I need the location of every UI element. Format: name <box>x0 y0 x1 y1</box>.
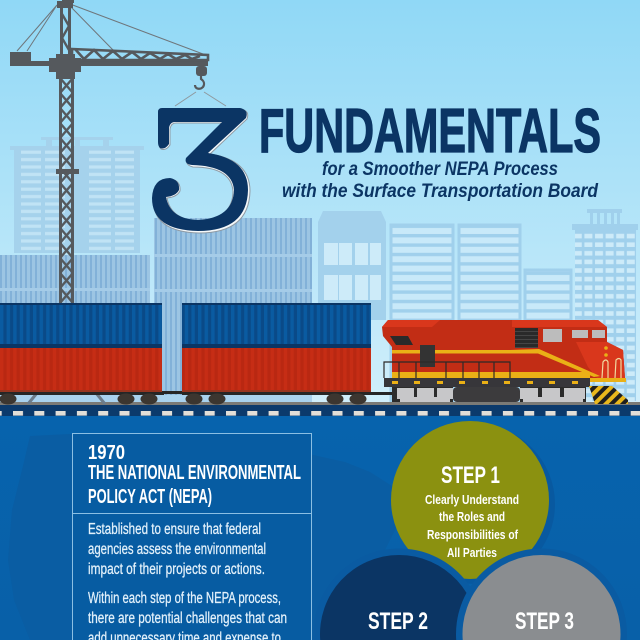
step 1 description: All Parties <box>447 545 497 560</box>
coupler to locomotive <box>371 392 395 395</box>
crane base legs <box>28 393 105 404</box>
blue lower panel <box>0 416 640 640</box>
container wagon left <box>0 303 164 404</box>
locomotive windows <box>543 329 605 342</box>
locomotive dark band <box>384 378 590 387</box>
circle: step 3 <box>456 549 627 640</box>
locomotive lights <box>604 346 608 357</box>
red container left <box>0 348 162 392</box>
locomotive door <box>420 345 435 367</box>
locomotive front truck <box>520 387 586 402</box>
step 1 description: Clearly Understand <box>425 492 519 507</box>
building: right tower <box>572 209 638 401</box>
circle: step 1 <box>391 421 555 584</box>
box body text <box>88 521 287 640</box>
building: striped tower one <box>391 225 453 405</box>
step 1 description: Responsibilities of <box>427 527 519 542</box>
building: left tower <box>10 137 144 253</box>
building: windowed block <box>318 211 386 320</box>
crane counterweight <box>10 52 55 66</box>
locomotive front handrails <box>602 358 621 378</box>
step 1 description: the Roles and <box>439 509 505 524</box>
locomotive <box>382 320 628 404</box>
subtitle <box>282 159 598 202</box>
crane mast <box>57 0 74 56</box>
locomotive body <box>382 320 625 378</box>
panel: NEPA info box <box>72 434 312 640</box>
box body text: there are potential challenges that can <box>88 610 287 627</box>
circle: step 2 <box>314 549 484 640</box>
locomotive railing <box>384 362 510 378</box>
locomotive roof highlights <box>382 320 607 327</box>
box heading <box>88 442 301 508</box>
subtitle: for a Smoother NEPA Process <box>322 159 558 180</box>
crane cables <box>17 4 203 54</box>
box frame <box>72 434 312 640</box>
step 3 heading: STEP 3 <box>515 608 574 635</box>
faint map of the United States <box>8 434 410 640</box>
background city skyline <box>0 137 638 405</box>
locomotive vent <box>390 336 413 345</box>
locomotive hazard pilot <box>589 386 628 404</box>
locomotive nose highlight <box>576 342 625 378</box>
red container right <box>182 348 371 392</box>
locomotive rear truck <box>392 387 453 402</box>
crane tower <box>56 78 79 303</box>
box body text: agencies assess the environmental <box>88 541 266 558</box>
coupler <box>162 391 183 394</box>
crane hook <box>175 66 226 106</box>
crane jib <box>72 49 208 66</box>
locomotive fuel tank <box>453 387 520 402</box>
crane hub <box>49 54 81 79</box>
sky background <box>0 0 640 416</box>
box body text: impact of their projects or actions. <box>88 561 265 578</box>
wheels left <box>0 394 158 404</box>
subtitle: with the Surface Transportation Board <box>282 181 598 202</box>
construction crane <box>10 0 226 303</box>
box heading: POLICY ACT (NEPA) <box>88 486 212 508</box>
step 1 heading: STEP 1 <box>441 462 500 489</box>
box heading: THE NATIONAL ENVIRONMENTAL <box>88 462 301 484</box>
wagon underframe left <box>0 392 164 395</box>
container wagon right <box>182 303 373 404</box>
background containers centre <box>154 218 312 403</box>
big number 3 <box>152 108 250 233</box>
step 1 description <box>425 492 519 560</box>
wheels right <box>186 394 366 404</box>
box heading: 1970 <box>88 442 125 464</box>
step 2 heading: STEP 2 <box>368 608 428 635</box>
locomotive yellow stripes <box>392 349 626 382</box>
box body text: Established to ensure that federal <box>88 521 261 538</box>
box body text: Within each step of the NEPA process, <box>88 590 281 607</box>
locomotive louvre <box>515 328 538 348</box>
blue container right <box>182 303 371 348</box>
train track <box>0 402 640 417</box>
blue container left <box>0 303 162 348</box>
wagon underframe right <box>182 392 373 395</box>
building: short striped tower <box>525 270 571 400</box>
building: striped tower two <box>459 225 520 405</box>
background containers left <box>0 255 150 403</box>
